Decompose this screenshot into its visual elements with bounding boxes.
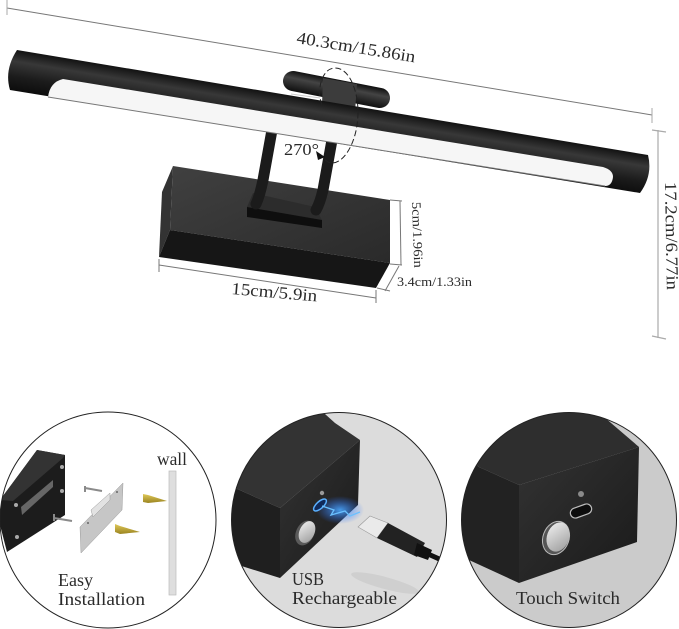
gold screws (115, 494, 167, 534)
arrow head (316, 151, 325, 160)
label: easy installation: Easy (58, 570, 93, 590)
lamp arms (256, 130, 332, 210)
dashed rotation arc (320, 68, 358, 163)
base left side (159, 166, 173, 257)
label: easy installation (58, 570, 145, 609)
lamp base rear (0, 450, 65, 552)
silver screws (54, 486, 102, 521)
dimension: total height (652, 130, 666, 339)
circle: easy installation (0, 412, 216, 628)
dimension: total width line (7, 0, 652, 123)
label: USB rechargeable (292, 569, 397, 608)
light bar (8, 50, 649, 193)
label: USB rechargeable: USB (292, 569, 324, 589)
floor shadow (351, 572, 418, 594)
label: wall: wall (157, 449, 187, 469)
LED strip lower edge (48, 97, 605, 186)
label: 5cm height: 5cm/1.96in (409, 202, 426, 269)
pivot joint (291, 78, 380, 112)
dimension: base length (159, 259, 376, 303)
dimension: base height (390, 200, 402, 265)
lamp base (232, 414, 360, 578)
label: USB rechargeable: Rechargeable (292, 588, 397, 608)
bar body (8, 50, 649, 193)
circle: USB rechargeable (226, 400, 446, 628)
label: touch switch: Touch Switch (516, 588, 620, 608)
indicator light (578, 491, 584, 497)
wall (169, 471, 176, 595)
rotation indicator (284, 68, 358, 163)
lamp base block (159, 166, 390, 288)
circle: touch switch (450, 400, 676, 628)
lamp mounting plate (247, 193, 322, 228)
label: easy installation: Installation (58, 589, 145, 609)
indicator light (320, 491, 324, 495)
USB plug (358, 516, 446, 562)
touch button (295, 520, 316, 546)
label: 3.4cm depth: 3.4cm/1.33in (397, 274, 473, 289)
white LED strip (48, 79, 613, 186)
dimension: base depth (377, 266, 399, 291)
label: 270 degrees: 270° (284, 140, 319, 159)
USB-C port (569, 503, 593, 519)
base bottom bevel (159, 230, 390, 288)
lamp base (462, 413, 639, 583)
base front face (170, 166, 390, 263)
touch button (542, 520, 570, 556)
glowing USB port (312, 496, 364, 524)
mounting plate (80, 483, 123, 553)
label: 40.3cm width: 40.3cm/15.86in (295, 28, 417, 66)
label: 15cm length: 15cm/5.9in (231, 279, 319, 306)
